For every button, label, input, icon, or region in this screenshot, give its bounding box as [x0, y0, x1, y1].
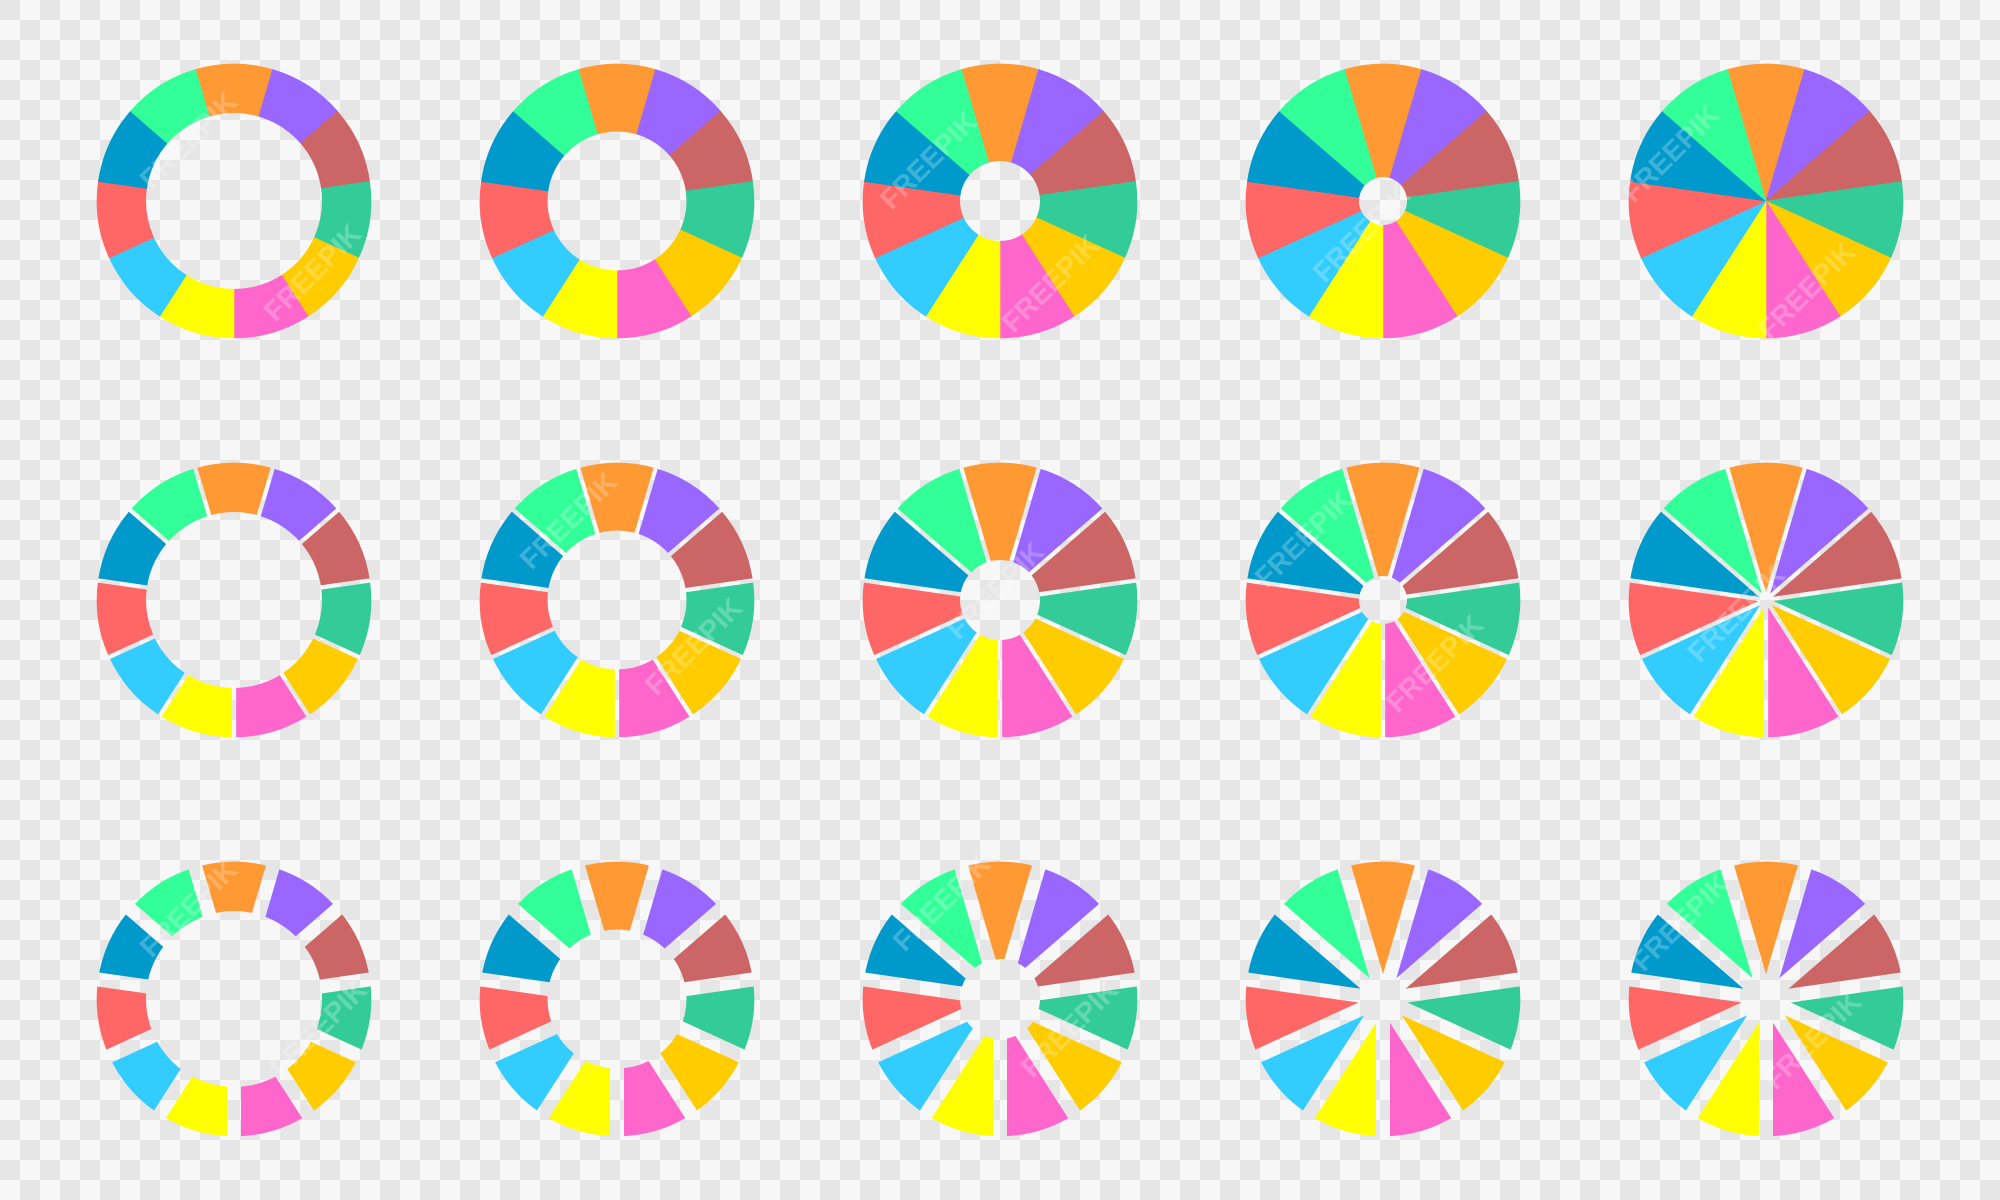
- wheel: row 2, thin ring, narrow gaps: [97, 463, 371, 737]
- watermarks: FREEPIK: [1249, 484, 1359, 594]
- wheel: row 3, thick ring, wide gaps: [863, 862, 1137, 1136]
- watermarks: FREEPIK: [1307, 179, 1417, 289]
- watermarks: FREEPIK: [1626, 868, 1736, 978]
- watermarks: FREEPIK: [514, 466, 624, 576]
- wheel: row 2, small hole, narrow gaps: [1246, 463, 1520, 737]
- watermarks: FREEPIK: [1758, 986, 1868, 1096]
- watermarks: [134, 86, 1868, 1096]
- wheel: row 2, full pie, narrow gaps: [1629, 463, 1903, 737]
- wheel: row 3, thin ring, wide gaps: [97, 862, 371, 1136]
- wheel: row 1, small hole, no gaps: [1246, 64, 1520, 338]
- watermarks: FREEPIK: [258, 218, 368, 328]
- wheel: row 1, medium ring, no gaps: [480, 64, 754, 338]
- wheel: row 1, full pie, no gaps: [1629, 64, 1903, 338]
- watermarks: FREEPIK: [1752, 236, 1862, 346]
- wheel: row 3, medium ring, wide gaps: [480, 862, 754, 1136]
- watermarks: FREEPIK: [1015, 974, 1125, 1084]
- watermarks: FREEPIK: [1380, 609, 1490, 719]
- watermarks: FREEPIK: [874, 106, 984, 216]
- wheel: row 2, thick ring, narrow gaps: [863, 463, 1137, 737]
- watermarks: FREEPIK: [941, 536, 1051, 646]
- wheel: row 1, thick ring, no gaps: [863, 64, 1137, 338]
- wheel: row 3, small hole, wide gaps: [1246, 862, 1520, 1136]
- watermarks: FREEPIK: [1616, 99, 1726, 209]
- watermarks: FREEPIK: [1682, 559, 1792, 669]
- watermarks: FREEPIK: [887, 848, 997, 958]
- watermarks: FREEPIK: [134, 854, 244, 964]
- watermarks: FREEPIK: [264, 974, 374, 1084]
- wheel: row 2, medium ring, narrow gaps: [480, 463, 754, 737]
- watermarks: FREEPIK: [639, 592, 749, 702]
- watermarks: FREEPIK: [134, 86, 244, 196]
- watermarks: FREEPIK: [996, 229, 1106, 339]
- wheel: row 1, thin ring, no gaps: [97, 64, 371, 338]
- wheel: row 3, full pie, wide gaps: [1629, 862, 1903, 1136]
